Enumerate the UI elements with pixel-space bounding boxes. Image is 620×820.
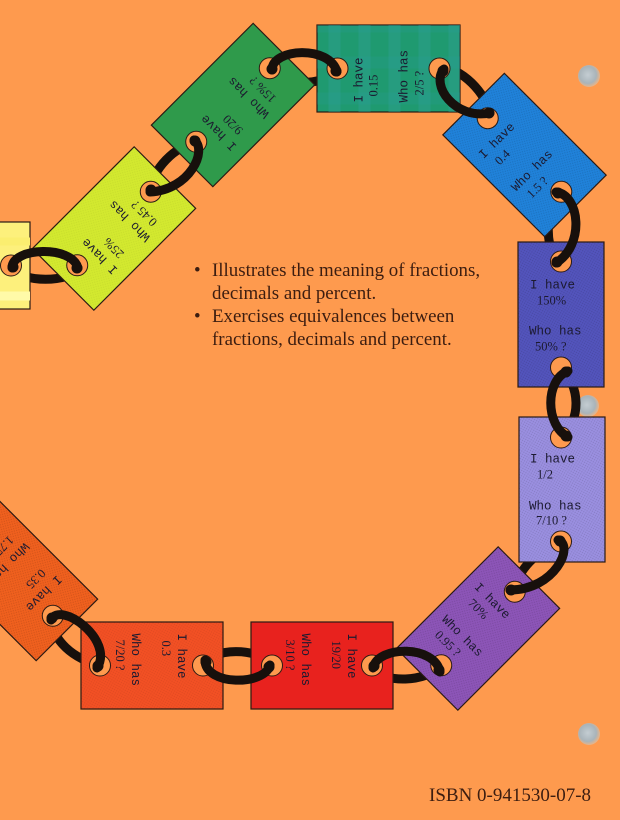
card: light violet, I have 1/2: Who has [529,500,582,514]
ring back: violet to purple [513,542,561,592]
bullet 1: • [194,260,201,281]
card: green, I have 9/20: 15% ? [246,73,279,106]
card: teal, I have 0.15: 0.15 [366,75,380,96]
ring back: lime to green [149,142,198,192]
card: red-orange, I have 0.3: 7/20 ? [113,640,127,671]
card: indigo, I have 150%: 150% [537,294,566,308]
bullet 2: fractions, decimals and percent. [212,329,452,350]
card: red, I have 19/20: 19/20 [329,640,343,669]
ring front: teal to blue [438,66,494,118]
card: red, I have 19/20: 3/10 ? [283,640,297,671]
card: indigo, I have 150%: 50% ? [535,340,567,354]
card: light violet, I have 1/2 [519,417,605,562]
card: green, I have 9/20 [151,23,315,187]
card: teal, I have 0.15: Who has [398,50,412,102]
card: green, I have 9/20: Who has [226,74,273,121]
card: red-orange, I have 0.3 [81,622,223,709]
card: purple, I have 70%: 70% [465,596,491,622]
binder hole: middle [577,395,599,417]
card: yellow, partly cut off at left edge [0,222,30,309]
card: red, I have 19/20: Who has [298,634,312,686]
ring back: purple to red [372,666,442,679]
card: lime, I have 25%: I have [79,235,121,277]
card: lime, I have 25% [32,147,196,310]
card: blue, I have 0.4: I have [476,120,518,162]
card: purple, I have 70% [396,547,560,710]
card: teal, I have 0.15 [317,25,460,112]
binder hole: top [578,65,600,87]
bullet 2: • [194,306,201,327]
card: red, I have 19/20 [251,622,393,709]
card: light violet, I have 1/2: 7/10 ? [536,514,567,528]
ring front: purple to red [368,651,444,676]
card: orange, I have 0.35, cut off at left edge [0,497,98,661]
card: blue, I have 0.4: 0.4 [492,146,513,168]
card: green, I have 9/20: I have [198,111,240,153]
ring front: red-orange to orange [46,612,104,672]
card: orange, I have 0.35, cut off at left edge: I have [22,572,64,614]
card: blue, I have 0.4: 1.5 ? [524,174,551,201]
card: light violet, I have 1/2: 1/2 [537,468,553,482]
binder hole: bottom [578,723,600,745]
ISBN: ISBN 0-941530-07-8 [429,785,591,806]
card: lime, I have 25%: 25% [101,235,127,261]
card: blue, I have 0.4: Who has [509,148,556,195]
ring front: blue to indigo [552,188,576,268]
ring front: green to teal [266,53,342,76]
ring back: red to red-orange [203,652,272,666]
card: green, I have 9/20: 9/20 [220,112,246,138]
card: teal, I have 0.15: I have [352,57,366,102]
ring back: yellow to lime [14,268,80,279]
ring front: indigo to violet [551,366,572,442]
card: purple, I have 70%: I have [471,580,513,622]
card: red, I have 19/20: I have [344,634,358,679]
card: indigo, I have 150%: Who has [529,324,582,338]
card: indigo, I have 150%: I have [530,278,575,292]
ring front: violet to purple [506,536,566,596]
card: red-orange, I have 0.3: Who has [128,634,142,686]
card: indigo, I have 150% [518,242,604,387]
card: purple, I have 70%: 0.95 ? [432,628,464,660]
ring back: blue to indigo [548,192,561,262]
card: teal, I have 0.15: 2/5 ? [412,70,426,96]
bullet 1: decimals and percent. [212,283,376,304]
card: lime, I have 25%: Who has [107,197,154,244]
ring front: red to red-orange [200,656,274,680]
card: light violet, I have 1/2: I have [530,452,575,466]
card: orange, I have 0.35, cut off at left edge: 0.35 [23,566,49,592]
bullet 2: Exercises equivalences between [212,306,455,327]
ring front: yellow to lime [8,251,82,274]
card: red-orange, I have 0.3: I have [174,634,188,679]
ring back: green to teal [271,72,337,82]
card: blue, I have 0.4 [443,73,606,237]
card: red-orange, I have 0.3: 0.3 [159,640,173,656]
bullet 1: Illustrates the meaning of fractions, [212,260,480,281]
card: purple, I have 70%: Who has [438,613,485,660]
ring back: indigo to violet [561,368,576,437]
ring back: teal to blue [439,68,490,115]
ring front: lime to green [146,136,200,196]
bullet list [194,260,480,350]
card: lime, I have 25%: 0.45 ? [128,197,160,229]
ring back: red-orange to orange [52,616,100,665]
